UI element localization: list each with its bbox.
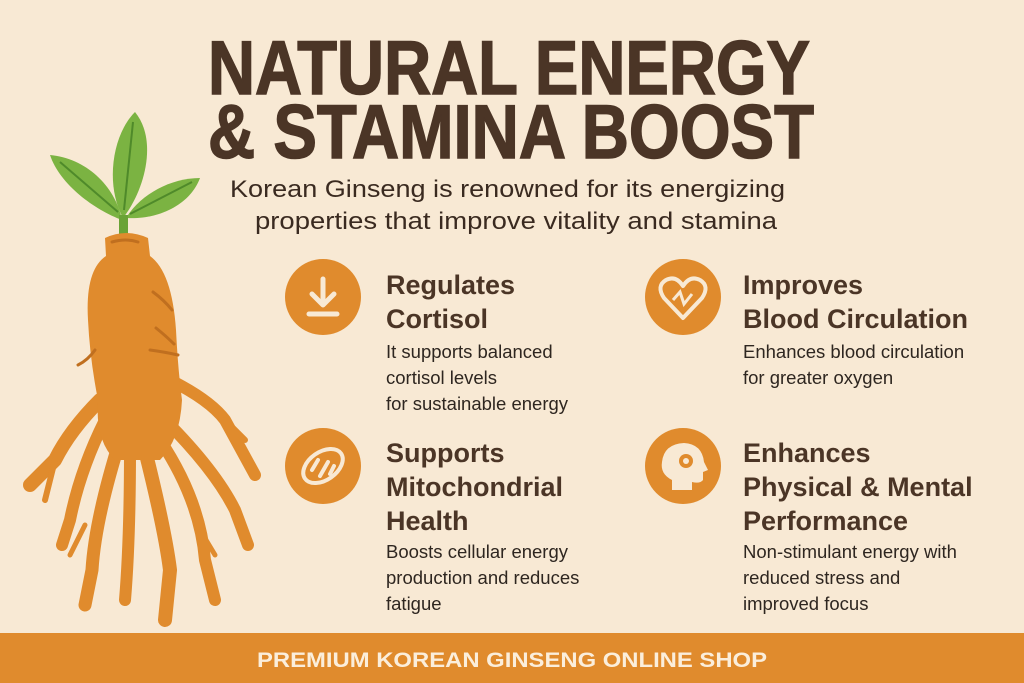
benefit: performance: reduced stress and: [743, 567, 900, 588]
benefit: blood circulation: for greater oxygen: [743, 367, 893, 388]
footer banner: PREMIUM KOREAN GINSENG ONLINE SHOP: [257, 649, 767, 672]
benefit: blood circulation: [645, 259, 968, 388]
footer banner: [0, 633, 1024, 683]
benefit: performance: Performance: [743, 506, 908, 536]
benefit: blood circulation: Blood Circulation: [743, 304, 968, 334]
benefit: mitochondrial health: Health: [386, 506, 469, 536]
benefit: mitochondrial health: Mitochondrial: [386, 472, 563, 502]
icon: head with gear: [645, 428, 721, 504]
benefit: blood circulation: Improves: [743, 270, 863, 300]
subtitle: properties that improve vitality and stamina: [255, 208, 777, 235]
benefit: regulates cortisol: It supports balanced: [386, 341, 553, 362]
illustration: ginseng root: [30, 112, 255, 620]
benefit: performance: Enhances: [743, 438, 871, 468]
benefit: regulates cortisol: cortisol levels: [386, 367, 497, 388]
benefit: mitochondrial health: fatigue: [386, 593, 442, 614]
icon: heart pulse: [645, 259, 721, 335]
benefit: mitochondrial health: [285, 428, 579, 614]
title: NATURAL ENERGY: [208, 26, 810, 111]
benefit: mitochondrial health: production and reduces: [386, 567, 579, 588]
benefit: mitochondrial health: Supports: [386, 438, 504, 468]
subtitle: Korean Ginseng is renowned for its energizing: [230, 176, 785, 203]
benefit: mitochondrial health: Boosts cellular energy: [386, 541, 569, 562]
leaves: [50, 112, 200, 236]
benefit: performance: [645, 428, 973, 614]
title: [208, 26, 814, 175]
icon: download arrow: [285, 259, 361, 335]
benefit: regulates cortisol: Regulates: [386, 270, 515, 300]
title: & STAMINA BOOST: [208, 90, 814, 175]
benefit: performance: improved focus: [743, 593, 868, 614]
benefit: performance: Non-stimulant energy with: [743, 541, 957, 562]
benefit: regulates cortisol: [285, 259, 569, 414]
icon: mitochondrion: [285, 428, 361, 504]
benefit: blood circulation: Enhances blood circulation: [743, 341, 964, 362]
benefit: regulates cortisol: Cortisol: [386, 304, 488, 334]
subtitle: [230, 176, 785, 235]
benefit: regulates cortisol: for sustainable energy: [386, 393, 569, 414]
root body and roots: [30, 380, 255, 620]
benefit: performance: Physical & Mental: [743, 472, 973, 502]
